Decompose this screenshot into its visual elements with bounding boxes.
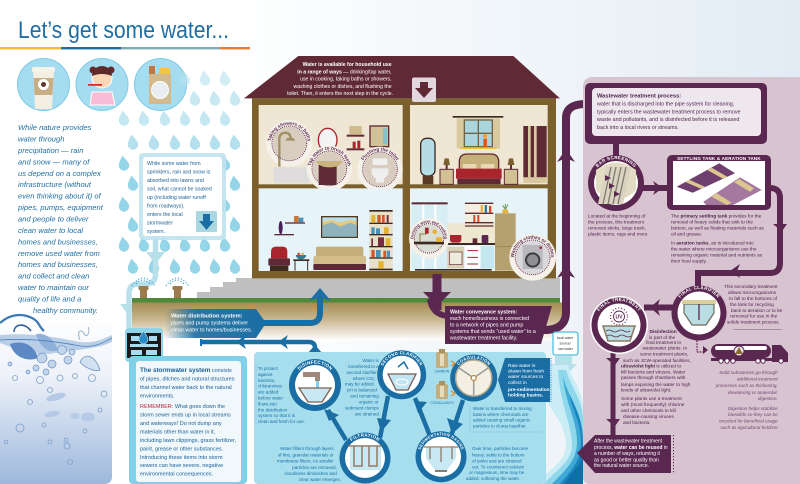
text: disinfection final treatment: passes through chambers with <box>621 375 686 381</box>
callout: wastewater process: typically enters the wastewater treatment process to remove <box>597 109 741 115</box>
intro paragraph: homes and businesses, <box>18 260 98 269</box>
intro paragraph: quality of life and a <box>18 295 81 304</box>
callout: raw water: pre-sedimentation <box>508 387 550 393</box>
text: bar screening: plastic items, rags and more. <box>588 232 649 238</box>
text: settling and aeration: oil and grease. <box>671 232 702 238</box>
process: settling tank and aeration tank <box>667 155 771 210</box>
text: disinfection: To protect <box>258 366 279 371</box>
text: settling and aeration: the water where microorganisms use the <box>671 246 757 252</box>
callout: toilet <box>358 146 403 188</box>
panel: stormwater system: paint, grease or other substances. <box>140 446 224 452</box>
text: coagulation: basins where chemicals are <box>473 412 529 417</box>
callout: water distribution system: pipes and pump systems deliver <box>171 320 248 326</box>
icon: biosolids truck <box>697 335 788 363</box>
callout: water conveyance system: to a network of pipes and pump <box>450 322 523 328</box>
callout: runoff note <box>139 153 226 240</box>
text: second clarifier: second clarifier <box>346 370 377 375</box>
text: disinfection final treatment: Disinfection <box>650 329 677 335</box>
icon: coagulants silo <box>430 381 455 405</box>
icon: washing machine <box>134 58 186 110</box>
text: sedimentation: out. To counteract calcium <box>472 464 524 470</box>
panel: stormwater system: materials other than water in it, <box>140 430 216 436</box>
room: kitchen <box>409 188 556 281</box>
callout: raw water: Raw water is <box>508 363 536 369</box>
text: disinfection final treatment: lamps exposing the water to high <box>621 382 691 388</box>
intro paragraph: and people to deliver <box>18 214 89 224</box>
intro paragraph: pipes, pumps, equipment <box>17 203 104 212</box>
text: disinfection: the distribution <box>258 407 288 412</box>
text: second clarifier: transferred to a <box>348 364 379 369</box>
panel: stormwater system: Introducing these items into storm <box>140 455 223 461</box>
text: solid substances: such as agricultural fertilizer. <box>720 425 779 430</box>
text: final clarifier: allows microorganisms <box>728 290 777 296</box>
text: filtration: membrane filters. As smaller <box>277 458 334 464</box>
roof text: toilet. Then, it enters the next step in the cycle. <box>287 91 393 97</box>
callout: runoff note: stormwater <box>147 220 173 226</box>
icon: sprinklers <box>132 278 189 298</box>
callout: water reuse <box>577 435 674 474</box>
text: disinfection final treatment: Some plants use a treatment <box>621 396 682 402</box>
process: final clarifier <box>672 286 726 340</box>
text: filtration: particles are removed, <box>292 465 337 470</box>
icon: storm drain <box>125 328 163 362</box>
room: bedroom <box>410 105 548 184</box>
callout: runoff note: sprinklers, rain and snow is <box>147 170 211 176</box>
text: solid substances: additional treatment <box>737 376 778 382</box>
process: bar screening <box>588 155 644 211</box>
text: coagulation: particles to clump together. <box>473 424 527 428</box>
text: sedimentation: Over time, particles become <box>472 446 529 451</box>
text: settling and aeration: In aeration tanks, air is introduced into <box>671 242 754 246</box>
process: settling tank and aeration tank: SETTLING TANK & AERATION TANK <box>677 156 761 161</box>
process: disinfection <box>289 359 341 411</box>
text: disinfection final treatment: some treatment plants, <box>640 352 688 358</box>
panel: stormwater system: and waterways! Do not dump any <box>140 421 222 427</box>
panel: stormwater system: REMEMBER: What goes down the <box>140 404 225 410</box>
photo: water splash and bubbles <box>0 315 112 484</box>
text: disinfection final treatment: wastewater plants. In <box>642 346 687 352</box>
panel: stormwater system: that channel water back to the natural <box>140 385 232 391</box>
rain drops <box>119 70 240 150</box>
callout: water reuse: as good or better quality than <box>594 458 659 464</box>
text: final clarifier: solids treatment process. <box>727 320 780 326</box>
callout: runoff note: soil, what cannot be soaked <box>147 186 212 192</box>
process: final treatment: UV <box>616 314 623 320</box>
process: final treatment: FINAL TREATMENT <box>596 298 642 312</box>
callout: runoff note: system. <box>147 229 165 235</box>
text: coagulation: Water is transferred to mixing <box>473 406 532 411</box>
text: sedimentation: or magnesium, lime may be <box>469 470 525 475</box>
intro paragraph: precipitation — rain <box>17 146 83 155</box>
text: second clarifier: and remaining <box>350 394 379 398</box>
panel: stormwater system: The stormwater system consists <box>140 367 232 374</box>
callout: sink: Tap water to brush teeth <box>308 146 351 166</box>
arrow: runoff pipe to storm drain <box>120 238 165 330</box>
text: second clarifier: are strained. <box>355 412 380 416</box>
callout: local water source <box>553 332 578 355</box>
callout: runoff note: enters the local <box>147 212 183 218</box>
text: disinfection final treatment: disease-causing viruses <box>623 414 674 420</box>
callout: showers: Taking showers or baths <box>268 122 310 142</box>
callout: local water source: local water <box>557 336 574 340</box>
text: disinfection final treatment: is part of the <box>649 335 675 341</box>
callout: washing: Washing clothes or dishes <box>510 235 554 258</box>
process: final treatment <box>590 296 648 354</box>
panel: stormwater system: including lawn clippings, grass fertilizer, <box>140 438 236 444</box>
callout: raw water <box>498 358 551 402</box>
callout: water conveyance system: Water conveyance system: <box>450 310 517 316</box>
panel: stormwater system: environmental consequences. <box>140 472 214 478</box>
text: disinfection: before water <box>258 396 284 400</box>
callout: runoff note: up (including water runoff <box>147 195 206 201</box>
text: settling and aeration: remaining organic material and nutrients as <box>671 252 763 258</box>
text: final clarifier: to fall to the bottoms of <box>729 296 778 302</box>
title rule <box>0 47 250 49</box>
text: final clarifier: This secondary treatment <box>724 284 778 290</box>
intro paragraph: healthy community. <box>33 306 98 315</box>
roof <box>244 56 560 98</box>
arrows: treatment flow <box>324 396 463 440</box>
text: second clarifier: where CO₂ <box>353 376 375 381</box>
panel: stormwater system <box>129 356 247 484</box>
text: second clarifier: organic or <box>359 400 379 404</box>
roof text: use in cooking, taking baths or showers, <box>300 77 392 83</box>
process: final clarifier: FINAL CLARIFIER <box>678 286 720 298</box>
callout: water distribution system <box>165 309 266 338</box>
text: filtration: cloudiness diminishes and <box>284 471 337 476</box>
icon: coagulants silo: COAGULANTS <box>430 401 454 405</box>
callout: drinking: Drinking water and cooking <box>410 220 447 239</box>
text: second clarifier: pH is balanced <box>347 388 377 392</box>
text: disinfection final treatment: levels of ultraviolet light. <box>621 388 671 394</box>
text: solid substances: biosolids so they can be <box>728 412 778 417</box>
text: disinfection final treatment: ultraviolet light is utilized to <box>621 364 681 370</box>
process: second clarifier: SECOND CLARIFIER <box>380 351 422 366</box>
text: filtration: clear water emerges. <box>299 477 341 482</box>
icon: child brushing teeth <box>76 58 128 110</box>
callout: wastewater process: back into a local rivers or streams. <box>597 125 679 131</box>
arrow: distribution pipes <box>200 288 331 362</box>
arrows: wastewater flow <box>606 144 787 437</box>
intro paragraph: homes and businesses, <box>18 237 98 246</box>
process: sedimentation basins: SEDIMENTATION BASINS <box>418 432 464 450</box>
text: sedimentation: heavy, settle to the bottom <box>472 452 525 458</box>
text: disinfection: bacteria, <box>258 378 275 383</box>
title: Let’s get some water... <box>18 17 229 44</box>
callout: local water source: raw water <box>558 347 574 351</box>
callout: raw water: drawn from fresh <box>508 368 544 374</box>
text: solid substances: Digestion helps stabilize <box>728 406 778 411</box>
intro paragraph: water through <box>18 134 64 143</box>
text: disinfection final treatment: with (most frequently) chlorine <box>621 402 685 408</box>
callout: water reuse: process, water can be reused in <box>594 445 668 451</box>
callout: washing <box>509 234 556 281</box>
callout: showers <box>266 120 312 167</box>
callout: wastewater process <box>585 83 767 144</box>
process: coagulation <box>450 354 498 402</box>
callout: raw water: water sources to <box>508 374 544 380</box>
text: filtration: Water filters through layers <box>280 446 334 451</box>
arrow: house to conveyance system <box>423 104 586 330</box>
text: disinfection: are added <box>258 390 279 395</box>
text: final clarifier: back to aeration or to be <box>731 308 783 314</box>
ground: soil <box>132 302 562 340</box>
roof text: in a range of ways — drinking/tap water, <box>297 69 392 75</box>
text: bar screening: Located at the beginning of <box>588 214 646 220</box>
text: second clarifier: may be added, <box>345 382 375 386</box>
callout: water conveyance system: systems that sends “used water” to a <box>450 329 536 335</box>
text: disinfection: flows into <box>258 401 277 406</box>
intro paragraph: While nature provides <box>18 123 92 132</box>
text: second clarifier: Water is <box>362 358 379 363</box>
text: disinfection final treatment: such as JCW-operated facilities, <box>623 358 691 364</box>
text: disinfection final treatment: kill bacteria and viruses. Water <box>621 370 686 376</box>
callout: water conveyance system: each home/business is connected <box>450 316 529 322</box>
callout: water reuse: the natural water source. <box>594 463 649 469</box>
intro paragraph: water to maintain our <box>18 283 89 292</box>
callout: drinking <box>409 218 449 258</box>
ground: grass <box>132 298 560 302</box>
process: coagulation: COAGULATION <box>457 356 490 366</box>
text: disinfection final treatment: and bacteria. <box>623 420 650 426</box>
room: bathroom <box>258 105 403 188</box>
roof text: washing clothes or dishes, and flushing the <box>294 84 392 90</box>
process: sedimentation basins <box>416 431 466 482</box>
text: solid substances: recycled for beneficial usage <box>719 418 778 424</box>
intro paragraph: infrastructure (without <box>18 180 92 189</box>
text: bar screening: removes sticks, large trash, <box>588 226 646 232</box>
text: filtration: of fine, granular materials or <box>278 452 334 458</box>
intro paragraph: clean water to local <box>18 226 83 235</box>
callout: water conveyance system: wastewater treatment facility. <box>450 336 517 342</box>
process: filtration <box>340 432 390 484</box>
callout: water reuse: a number of ways, returning it <box>594 451 660 457</box>
text: final clarifier: removed for use in the <box>730 314 778 320</box>
text: bar screening: the process, this treatment <box>588 220 645 226</box>
lower rain drops <box>119 156 240 274</box>
intro paragraph: and snow — many of <box>18 157 90 166</box>
process: second clarifier <box>377 350 426 400</box>
intro paragraph: us depend on a complex <box>18 169 102 178</box>
callout: runoff note: absorbed into lawns and <box>147 178 204 184</box>
icon: coffee cup <box>18 58 70 110</box>
water source waves <box>536 356 583 484</box>
text: settling and aeration: bottom, as well as floating materials such as <box>671 226 765 232</box>
text: solid substances: Solid substances go through <box>719 370 778 375</box>
callout: local water source: source/ <box>559 342 571 346</box>
text: disinfection: system so that it is <box>258 413 296 418</box>
text: sedimentation: of tanks and are strained <box>472 458 522 464</box>
callout: wastewater process: water that is discharged into the pipe system for cleaning, <box>596 102 735 108</box>
intro paragraph: even thinking about it) of <box>18 192 102 201</box>
house <box>244 56 560 281</box>
intro paragraph: and collect and clean <box>18 272 89 281</box>
callout: water distribution system: Water distribution system: <box>171 314 243 320</box>
callout: water conveyance system <box>445 306 552 344</box>
panel: stormwater system: environments. <box>140 393 175 399</box>
icon: carbon silo: CARBON <box>435 370 450 374</box>
callout: sink <box>306 146 352 188</box>
text: sedimentation: added, softening the water. <box>466 476 520 481</box>
text: coagulation: added causing small organic <box>473 418 531 422</box>
text: disinfection final treatment: and other chemicals to kill <box>621 408 676 414</box>
text: solid substances: dewatering or anaerobic <box>728 390 778 395</box>
ground: steps <box>197 278 560 300</box>
text: final clarifier: the tank for recycling <box>730 302 774 308</box>
text: settling and aeration: their food supply. <box>671 258 707 264</box>
process: disinfection: DISINFECTION <box>297 360 332 370</box>
text: disinfection: clean and fresh for use. <box>258 419 305 424</box>
callout: raw water: collect in <box>508 380 527 386</box>
roof text: Water is available for household use <box>303 62 392 68</box>
panel: stormwater system: sewers can have severe, negative <box>140 463 223 469</box>
panel: stormwater system: of pipes, ditches and natural structures <box>140 376 235 382</box>
text: disinfection final treatment: final treatment in <box>646 340 681 346</box>
callout: water reuse: After the wastewater treatment <box>594 438 663 444</box>
callout: runoff note: from roadways), <box>147 204 185 210</box>
intro paragraph: remove used water from <box>18 249 100 258</box>
callout: runoff note: While some water from <box>147 161 201 167</box>
panel: stormwater system: storm sewer ends up in local streams <box>140 413 231 419</box>
panel: drinking water treatment <box>254 352 551 484</box>
text: settling and aeration: The primary settling tank provides for the <box>671 214 761 220</box>
text: second clarifier: sediment clumps <box>345 406 379 410</box>
room: living room <box>259 188 403 271</box>
walls <box>252 98 556 278</box>
text: settling and aeration: removal of heavy solids that sink to the <box>671 220 753 226</box>
process: bar screening: BAR SCREENING <box>596 156 636 168</box>
callout: raw water: holding basins. <box>508 392 543 398</box>
callout: wastewater process: waste and pollutants, and is disinfected before it is released <box>596 117 739 123</box>
callout: toilet: Flushing the toilet <box>361 148 399 160</box>
text: disinfection: against <box>258 372 273 377</box>
icon: carbon silo <box>435 349 455 374</box>
text: disinfection: chloramines <box>258 384 283 389</box>
text: solid substances: digestion. <box>758 396 778 401</box>
text: solid substances: processes such as thickening, <box>715 383 778 388</box>
callout: wastewater process: Wastewater treatment process: <box>597 94 681 100</box>
panel: wastewater treatment <box>577 77 800 484</box>
process: filtration: FILTRATION <box>350 434 380 442</box>
callout: water distribution system: clean water to homes/businesses. <box>171 328 252 334</box>
icon: roof down arrow <box>412 78 436 102</box>
